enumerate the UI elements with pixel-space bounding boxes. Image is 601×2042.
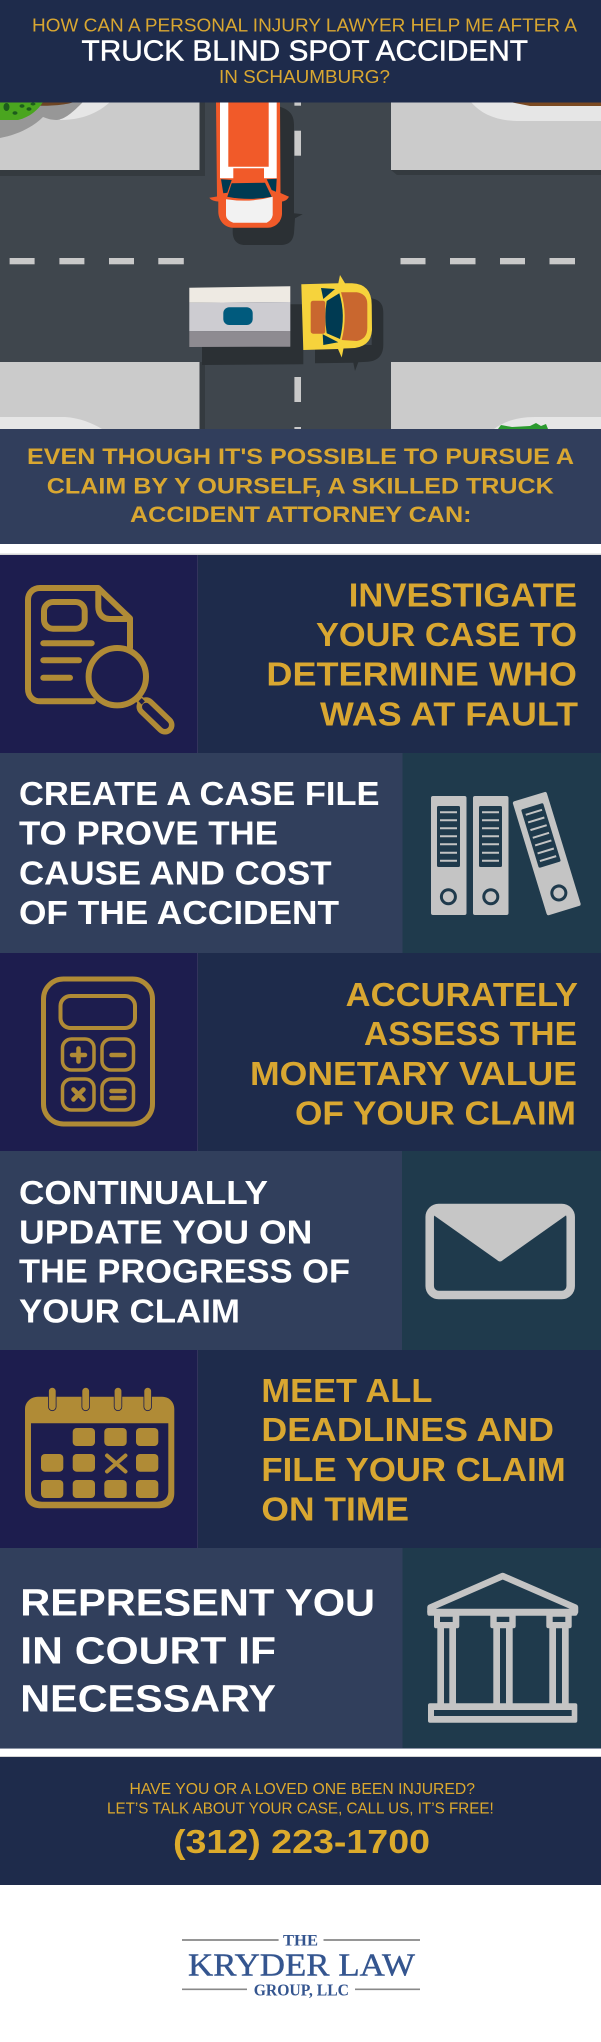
phone number: (312) 223-1700 — [173, 1823, 430, 1860]
header banner — [0, 0, 601, 102]
panel: court — [0, 1548, 601, 1748]
logo: THE — [283, 1933, 318, 1950]
text: monetary value: ASSESS THE — [364, 1015, 577, 1052]
text: investigate — [266, 577, 578, 733]
text: case file: CAUSE AND COST — [19, 854, 332, 891]
icon: courthouse — [427, 1576, 577, 1723]
text: monetary value: ACCURATELY — [346, 976, 578, 1013]
text: deadlines: MEET ALL — [261, 1372, 432, 1409]
text: deadlines: DEADLINES AND — [261, 1411, 554, 1448]
text: monetary value — [250, 976, 578, 1132]
text: updates: YOUR CLAIM — [19, 1293, 240, 1330]
title main line: TRUCK BLIND SPOT ACCIDENT — [82, 36, 528, 68]
icon: envelope — [430, 1208, 571, 1295]
panel: deadlines — [0, 1350, 601, 1548]
text: court: NECESSARY — [20, 1679, 276, 1721]
icon: document with magnifier — [28, 588, 165, 725]
icon: yellow truck with trailer — [189, 275, 383, 371]
text: case file: CREATE A CASE FILE — [19, 775, 380, 812]
call to action banner — [0, 1757, 601, 1885]
icon: tree foliage — [0, 102, 43, 120]
text: case file: OF THE ACCIDENT — [19, 894, 339, 931]
text: updates: CONTINUALLY — [19, 1174, 268, 1211]
icon: orange truck — [209, 102, 303, 245]
icon: calculator — [44, 979, 152, 1124]
title line three: IN SCHAUMBURG? — [219, 66, 390, 87]
text: deadlines: ON TIME — [261, 1491, 409, 1528]
panel: investigate — [0, 555, 601, 753]
panel: monetary value — [0, 953, 601, 1151]
text: deadlines: FILE YOUR CLAIM — [261, 1451, 566, 1488]
text: updates — [19, 1174, 350, 1330]
text: updates: THE PROGRESS OF — [19, 1253, 350, 1290]
logo: GROUP, LLC — [254, 1981, 349, 2000]
text: updates: UPDATE YOU ON — [19, 1214, 312, 1251]
text: case file: TO PROVE THE — [19, 815, 278, 852]
text: court: IN COURT IF — [20, 1631, 276, 1673]
logo — [182, 1933, 420, 2000]
text: case file — [19, 775, 380, 931]
icon: binders — [431, 791, 581, 916]
text: monetary value: OF YOUR CLAIM — [295, 1095, 576, 1132]
call to action banner: HAVE YOU OR A LOVED ONE BEEN INJURED? — [130, 1781, 475, 1798]
text: investigate: WAS AT FAULT — [320, 696, 578, 733]
panel: case file — [0, 753, 601, 953]
icon: calendar — [25, 1387, 174, 1508]
text: deadlines — [261, 1372, 566, 1528]
title line one: HOW CAN A PERSONAL INJURY LAWYER HELP ME AFTER A — [32, 14, 578, 36]
intro band: CLAIM BY Y OURSELF, A SKILLED TRUCK — [47, 474, 555, 498]
intro band — [0, 429, 601, 544]
logo: KRYDER LAW — [188, 1947, 416, 1983]
call to action banner: LET’S TALK ABOUT YOUR CASE, CALL US, IT’S FREE! — [107, 1800, 494, 1817]
road scene illustration — [0, 102, 601, 429]
text: investigate: YOUR CASE TO — [316, 616, 577, 653]
text: investigate: INVESTIGATE — [349, 577, 577, 614]
panel: updates — [0, 1151, 601, 1350]
icon: roadside bush — [498, 423, 548, 429]
text: court — [20, 1583, 375, 1721]
intro band: ACCIDENT ATTORNEY CAN: — [130, 502, 472, 527]
lane markings — [10, 102, 575, 429]
text: monetary value: MONETARY VALUE — [250, 1055, 577, 1092]
text: investigate: DETERMINE WHO — [266, 656, 577, 693]
intro band: EVEN THOUGH IT'S POSSIBLE TO PURSUE A — [27, 444, 574, 469]
text: court: REPRESENT YOU — [20, 1583, 375, 1625]
